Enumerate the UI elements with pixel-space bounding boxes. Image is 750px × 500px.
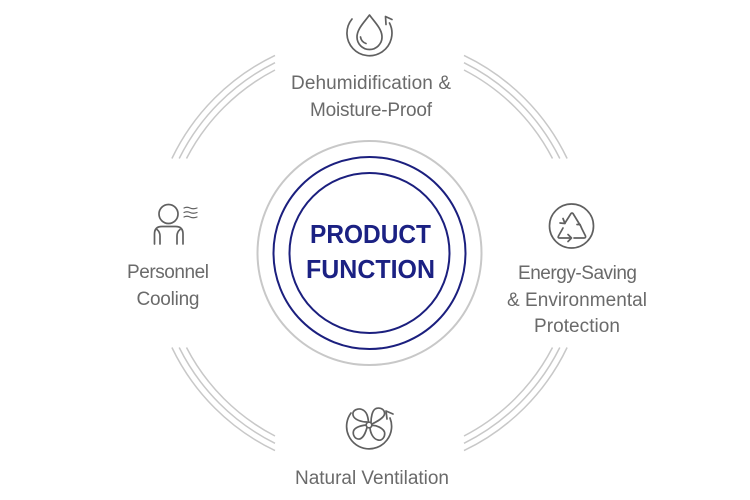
icon: fan with circular arrow	[347, 408, 393, 449]
label: natural ventilation: Natural Ventilation	[295, 468, 449, 489]
center title: PRODUCT	[310, 221, 431, 249]
label: personnel cooling: Cooling	[136, 289, 200, 310]
center badge	[258, 141, 482, 365]
center title	[306, 221, 435, 284]
label: energy-saving: & Environmental	[507, 290, 647, 311]
label: dehumidification: Dehumidification &	[291, 73, 451, 94]
icon: person with air waves	[154, 204, 197, 244]
center title: FUNCTION	[306, 256, 435, 284]
label: energy-saving: Protection	[534, 316, 620, 337]
label: energy-saving: Energy-Saving	[518, 263, 637, 284]
arc group: top right	[464, 55, 567, 158]
label: personnel cooling	[127, 262, 209, 310]
label: energy-saving	[507, 263, 647, 337]
arc group: top left	[172, 55, 275, 158]
label: dehumidification	[291, 73, 451, 121]
arc group: bottom right	[464, 348, 567, 451]
label: personnel cooling: Personnel	[127, 262, 209, 283]
label: dehumidification: Moisture-Proof	[310, 100, 433, 121]
icon: water drop with circular arrow	[347, 15, 392, 56]
icon: recycling	[550, 204, 594, 248]
arc group: bottom left	[172, 348, 275, 451]
